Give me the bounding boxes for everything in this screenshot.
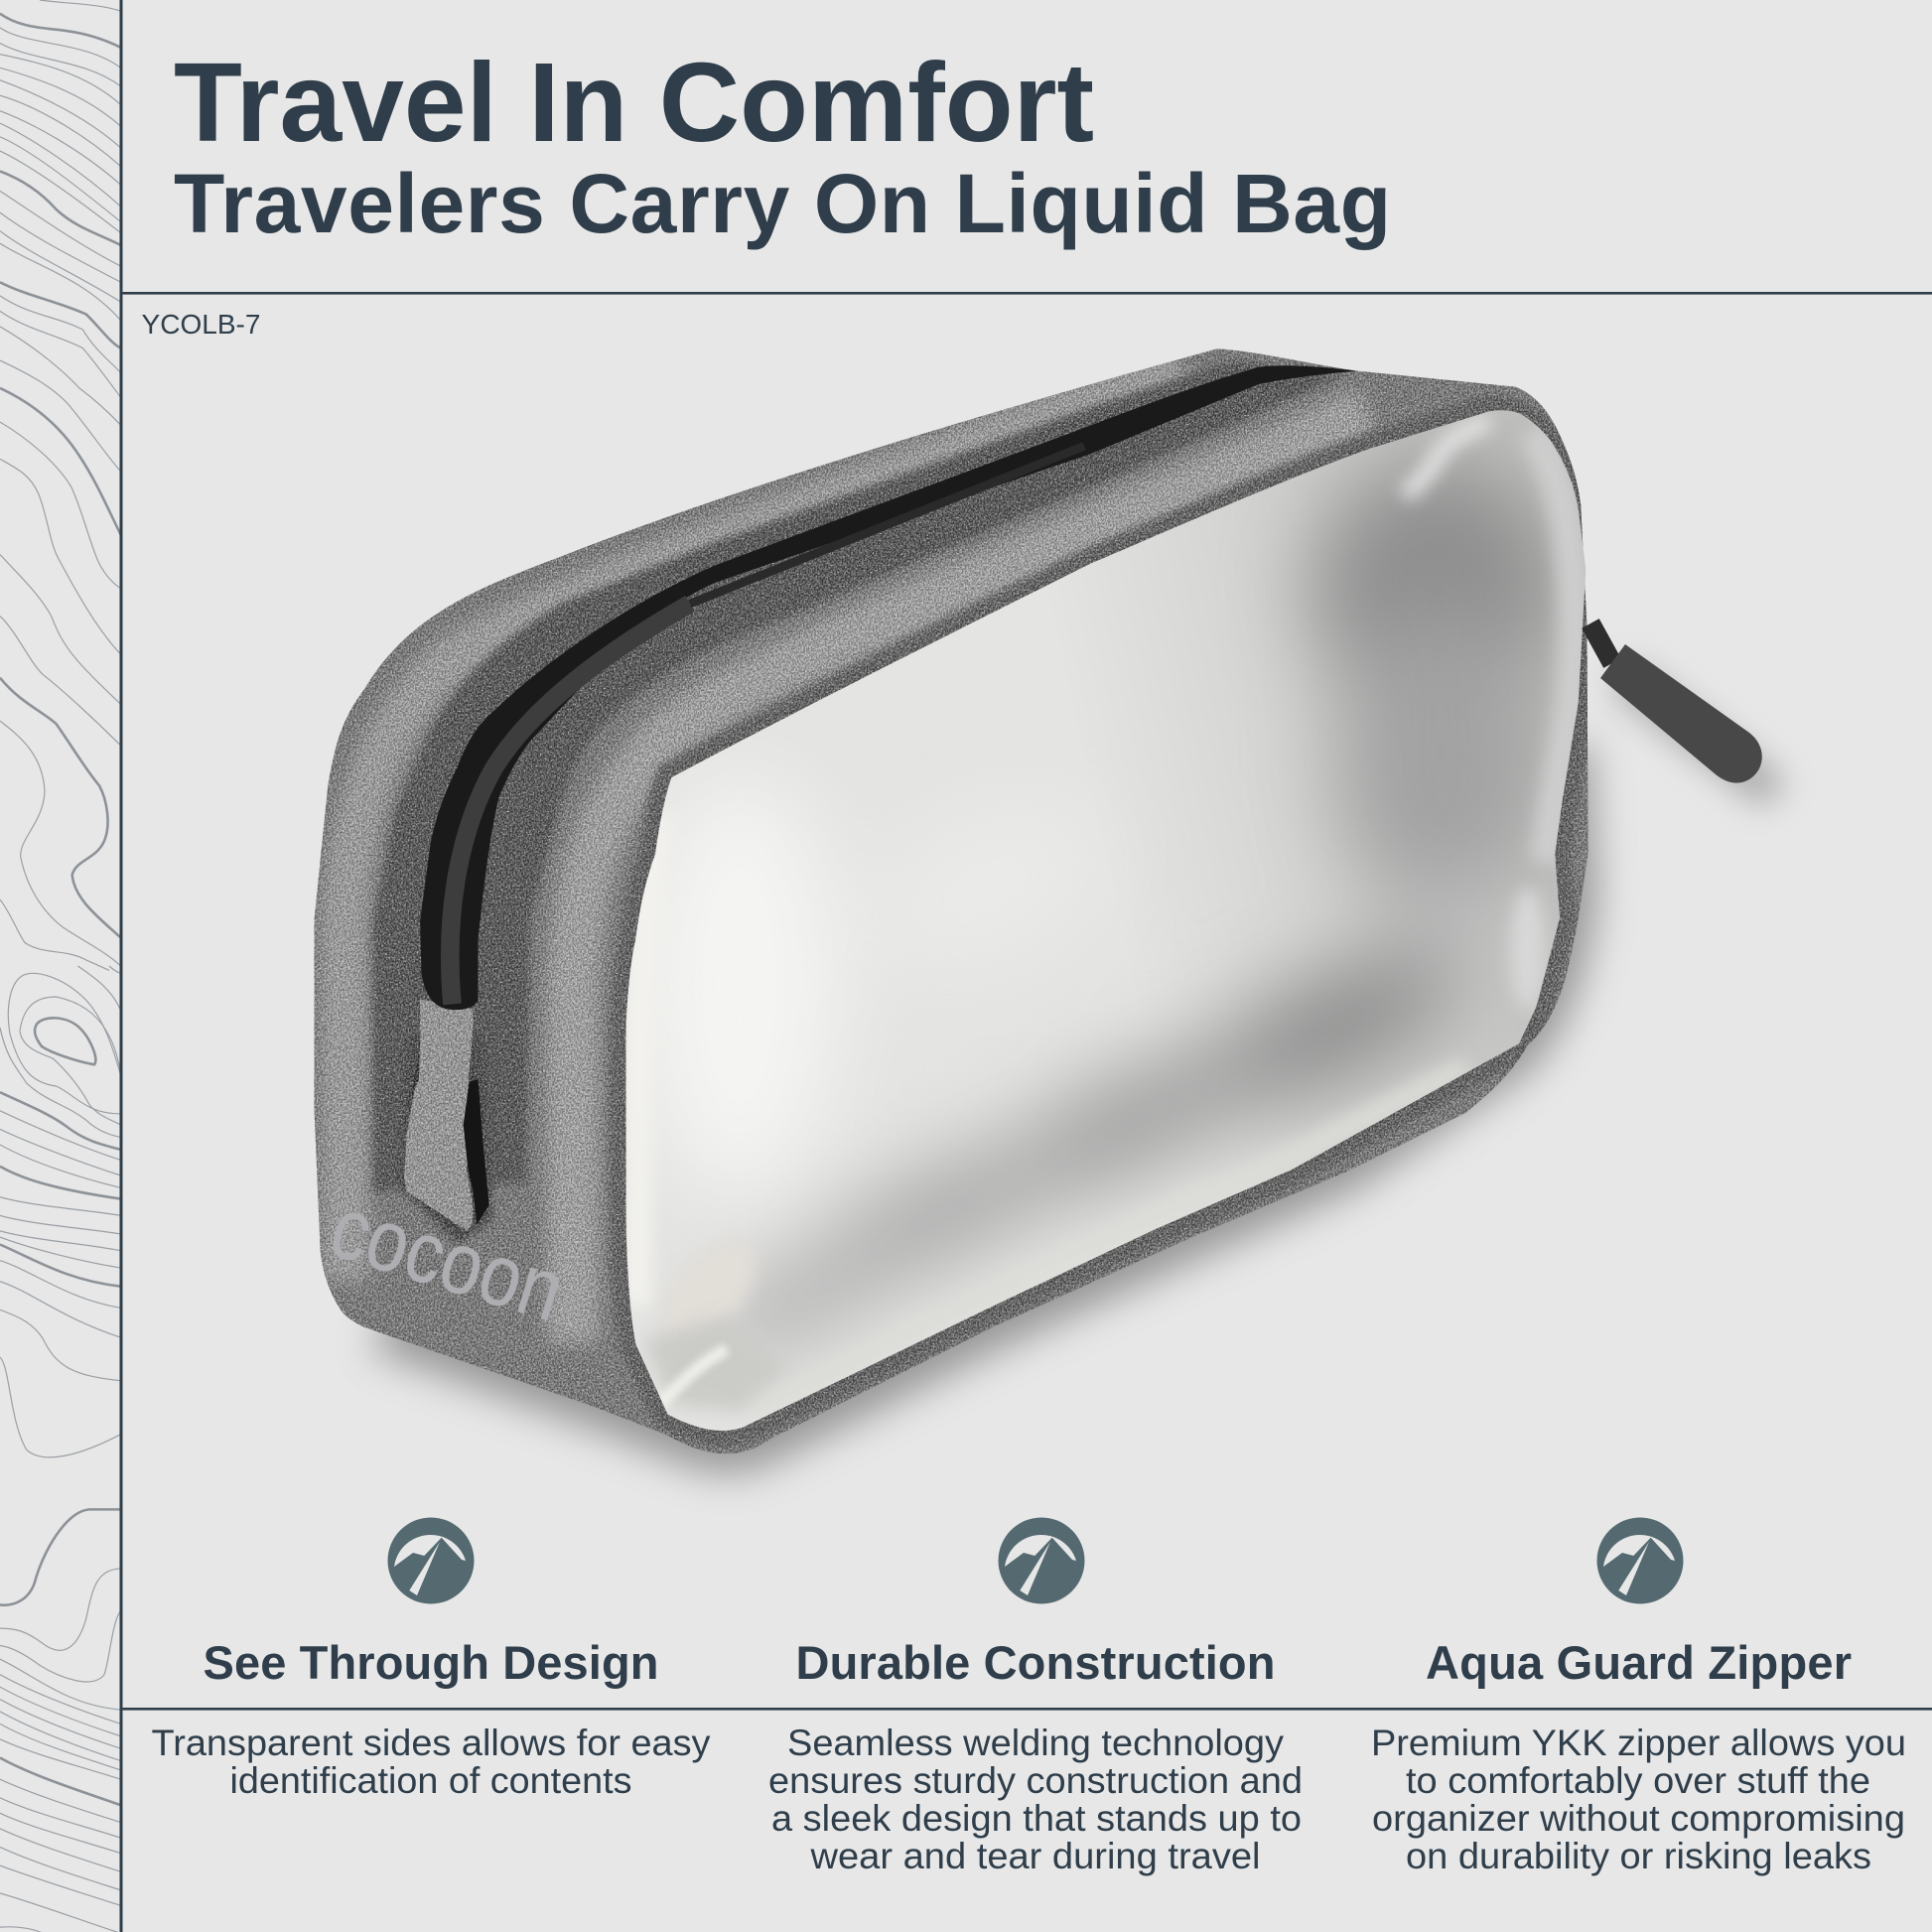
panel right tone (1138, 411, 1586, 1127)
zipper pull tab (404, 999, 474, 1231)
icon: mountain badge (999, 1517, 1084, 1604)
fabric weave grain (314, 349, 1588, 1453)
light fabric inner band (573, 413, 1368, 1343)
icon: mountain badge (1596, 1517, 1684, 1604)
description: Transparent sides allows for easy (151, 1723, 711, 1763)
description: ensures sturdy construction and (768, 1760, 1303, 1801)
feature: see through design (151, 1517, 711, 1801)
description: organizer without compromising (1372, 1798, 1905, 1839)
description (151, 1723, 711, 1801)
feature: durable construction (768, 1517, 1303, 1876)
description (768, 1723, 1303, 1876)
panel corner crease (699, 1257, 756, 1318)
panel seam (625, 411, 1586, 1431)
feature: aqua guard zipper (1371, 1517, 1906, 1876)
cocoon logo: cocoon (320, 1176, 575, 1340)
zipper pull shadow (1633, 685, 1762, 784)
fabric shell (314, 348, 1588, 1453)
description: identification of contents (230, 1760, 631, 1801)
panel lower right highlight (1510, 888, 1545, 1011)
bag body (271, 321, 1626, 1491)
header rule (121, 292, 1932, 295)
product photo: liquid bag (271, 321, 1762, 1491)
zipper ribbon highlight (450, 604, 690, 1004)
subtitle: Travelers Carry On Liquid Bag (174, 157, 1391, 250)
panel highlight right edge (1534, 431, 1575, 863)
description: Premium YKK zipper allows you (1371, 1723, 1906, 1763)
description: Seamless welding technology (787, 1723, 1285, 1763)
panel ridge highlight (1405, 421, 1489, 495)
transparent panel (604, 394, 1614, 1453)
tab halo (402, 1035, 492, 1244)
zipper upper ribbon (690, 446, 1084, 604)
dark fabric band around zipper (373, 361, 1343, 1191)
icon: mountain badge (387, 1517, 475, 1604)
bag drop shadow (369, 740, 1596, 1473)
zipper cord (1590, 623, 1612, 663)
light fabric outer band (344, 369, 1182, 1282)
panel left edge highlight (638, 813, 659, 1306)
description (1371, 1723, 1906, 1876)
zipper pull (1600, 644, 1762, 783)
panel soft shading (640, 462, 1559, 1377)
product code: YCOLB-7 (141, 309, 260, 340)
panel bottom edge highlight (752, 1067, 1466, 1412)
title: Travel In Comfort (174, 40, 1094, 165)
features rule (121, 1708, 1932, 1711)
topographic contour strip (0, 0, 121, 1932)
description: wear and tear during travel (809, 1836, 1261, 1876)
tab slit (464, 1079, 489, 1225)
description: on durability or risking leaks (1406, 1836, 1871, 1876)
description: a sleek design that stands up to (771, 1798, 1302, 1839)
heading: See Through Design (203, 1636, 659, 1689)
zipper tape (420, 365, 1356, 1010)
heading: Aqua Guard Zipper (1426, 1636, 1852, 1689)
heading: Durable Construction (796, 1636, 1275, 1689)
description: to comfortably over stuff the (1406, 1760, 1870, 1801)
vertical rule (119, 0, 123, 1932)
fabric white flecks (314, 349, 1588, 1453)
